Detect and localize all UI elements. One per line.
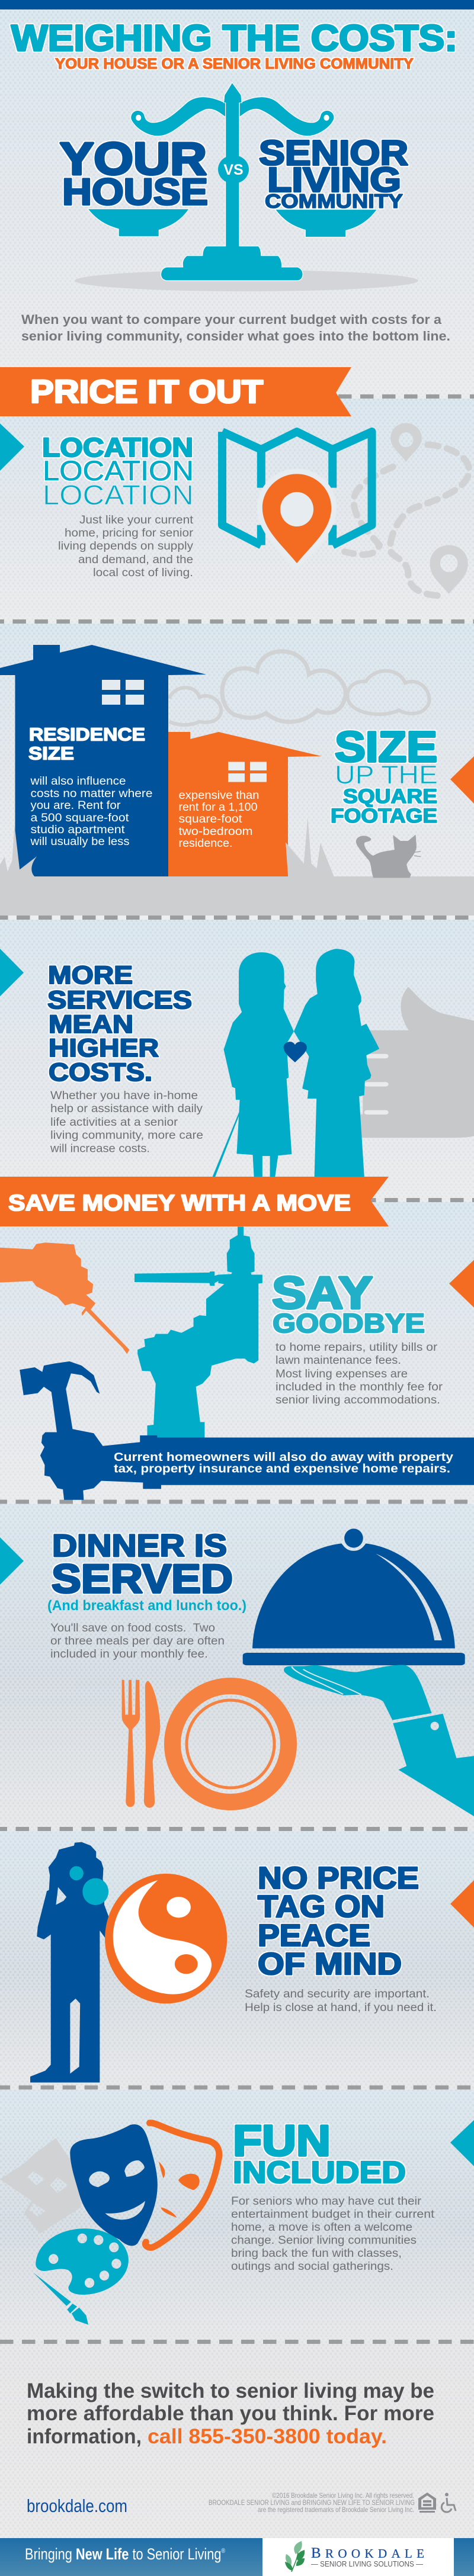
heading: say goodbye: SAY — [272, 1267, 373, 1318]
peace of mind text: Help is close at hand, if you need it. — [245, 2002, 437, 2014]
icon: route and pins — [345, 423, 469, 596]
meals text — [50, 1622, 225, 1660]
tagline: Bringing New Life to Senior Living — [25, 2545, 244, 2563]
icon: plate — [172, 1686, 289, 1802]
call to action: information, — [27, 2425, 142, 2448]
fun text: For seniors who may have cut their — [231, 2195, 422, 2208]
banner: save money with a move: SAVE MONEY WITH A MOVE — [8, 1191, 351, 1216]
panel: no price tag — [30, 1842, 474, 2083]
services text: living community, more care — [50, 1129, 203, 1142]
legal text: are the registered trademarks of Brookdale Senior Living Inc. — [258, 2506, 414, 2514]
heading: more services mean higher costs: SERVICES — [47, 986, 192, 1014]
meals text: included in your monthly fee. — [50, 1648, 208, 1660]
services text: Whether you have in-home — [50, 1090, 198, 1102]
panel: say goodbye — [0, 1226, 474, 1500]
heading: fun included: FUN — [233, 2117, 331, 2165]
fun text: outings and social gatherings. — [231, 2260, 393, 2273]
blue house: you are. Rent for — [31, 799, 121, 812]
location text: home, pricing for senior — [65, 527, 194, 539]
heading: no price tag on peace of mind: OF MIND — [258, 1947, 402, 1981]
heading: no price tag on peace of mind: NO PRICE — [258, 1861, 419, 1896]
subheading: (And breakfast and lunch too.) — [47, 1598, 246, 1614]
logo name: B ROOKDALE — [311, 2545, 424, 2561]
location text: and demand, and the — [78, 554, 193, 566]
blue house: RESIDENCE — [29, 724, 145, 745]
icon: tragedy mask outline — [145, 2123, 219, 2247]
heading: size up the square footage: SIZE — [335, 724, 437, 771]
heading: location: LOCATION — [43, 455, 194, 486]
icon: puzzle — [0, 2138, 82, 2234]
icon: waiter hand — [284, 1665, 474, 1816]
blue bar with hammer hand: Current homeowners will also do away with property — [114, 1450, 454, 1464]
scale shadow — [75, 270, 418, 291]
heading: your house — [60, 134, 208, 213]
fun text — [231, 2195, 435, 2273]
chevron — [450, 2120, 474, 2166]
goodbye text: Most living expenses are — [276, 1368, 408, 1380]
heading: no price tag on peace of mind: TAG ON — [258, 1890, 385, 1924]
heading: more services mean higher costs: HIGHER — [49, 1034, 159, 1062]
icon: serving cloche — [243, 1528, 465, 1665]
vs badge — [218, 155, 249, 184]
chevron — [450, 1880, 474, 1928]
heading: dinner is served: DINNER IS — [52, 1528, 227, 1563]
tagline: ® — [221, 2548, 225, 2555]
heading: your house: YOUR — [60, 134, 207, 185]
orange house: rent for a 1,100 — [179, 801, 257, 814]
banner: price it out: PRICE IT OUT — [30, 373, 263, 410]
grass — [0, 817, 334, 876]
icon: person with headset — [30, 1842, 110, 2083]
intro text: When you want to compare your current budget with costs for a — [21, 312, 442, 327]
website: brookdale.com — [27, 2495, 127, 2516]
location text — [58, 514, 194, 579]
chevron — [0, 1537, 24, 1585]
chevron — [0, 949, 24, 996]
panel: dinner is served — [0, 1528, 474, 1816]
heading: no price tag on peace of mind: PEACE — [258, 1919, 370, 1953]
blue bar with hammer hand — [20, 1361, 474, 1500]
heading: more services mean higher costs: COSTS. — [49, 1058, 152, 1087]
heading: say goodbye: GOODBYE — [273, 1308, 425, 1338]
icon: yin yang — [105, 1874, 227, 2003]
heading: size up the square footage — [331, 724, 438, 827]
meals text: You'll save on food costs. Two — [50, 1622, 215, 1634]
orange house: two-bedroom — [179, 826, 252, 838]
heading: senior living community: COMMUNITY — [265, 190, 403, 212]
panel: closing — [27, 2379, 456, 2516]
legal text: ©2016 Brookdale Senior Living Inc. All rights reserved. — [272, 2491, 414, 2500]
clouds — [169, 651, 430, 725]
vs badge: VS — [223, 162, 244, 178]
blue house: costs no matter where — [31, 788, 153, 800]
services text — [50, 1090, 203, 1155]
panel: more services — [0, 949, 474, 1177]
panel: header — [11, 18, 457, 343]
icon: balance scale — [88, 82, 377, 281]
chevron — [450, 756, 474, 804]
call to action — [27, 2379, 434, 2448]
heading: size up the square footage: UP THE — [335, 760, 438, 789]
blue house: will usually be less — [30, 836, 130, 848]
services text: life activities at a senior — [50, 1116, 178, 1129]
intro text: senior living community, consider what goes into the bottom line. — [21, 329, 450, 343]
icon: map with pin — [222, 432, 372, 563]
heading: location — [42, 432, 194, 510]
blue bar with hammer hand: tax, property insurance and expensive home repairs. — [114, 1462, 450, 1476]
heading: your house: HOUSE — [62, 172, 208, 213]
icon: accessibility — [441, 2493, 456, 2512]
icon: equal housing — [418, 2493, 436, 2513]
panel: fun included — [0, 2117, 474, 2325]
peace of mind text: Safety and security are important. — [245, 1988, 430, 2000]
banner: save money with a move — [0, 1177, 389, 1226]
heading: more services mean higher costs: MORE — [48, 961, 133, 990]
orange house: residence. — [179, 837, 232, 850]
icon: fork and knife — [122, 1680, 160, 1808]
icon: leaf sprig — [285, 2541, 305, 2572]
fun text: bring back the fun with classes, — [231, 2247, 402, 2260]
fun text: home, a move is often a welcome — [231, 2221, 412, 2234]
orange house — [168, 732, 322, 876]
heading: location: LOCATION — [43, 479, 194, 510]
logo panel — [262, 2538, 454, 2576]
icon: palette and brush — [33, 2228, 129, 2325]
goodbye text: included in the monthly fee for — [276, 1381, 443, 1393]
top bar — [0, 0, 474, 9]
chevron — [449, 1260, 474, 1308]
heading: size up the square footage: SQUARE — [343, 785, 437, 808]
services text: help or assistance with daily — [50, 1103, 203, 1115]
goodbye text: lawn maintenance fees. — [276, 1354, 401, 1367]
services text: will increase costs. — [50, 1143, 150, 1155]
goodbye text — [276, 1341, 443, 1406]
heading: fun included: INCLUDED — [233, 2156, 406, 2190]
blue house: SIZE — [28, 743, 74, 764]
fun text: entertainment budget in their current — [231, 2208, 435, 2221]
location text: Just like your current — [79, 514, 194, 526]
heading: no price tag on peace of mind — [258, 1861, 419, 1981]
call to action: more affordable than you think. For more — [27, 2402, 434, 2425]
heading: senior living community — [259, 134, 408, 212]
heading: dinner is served: SERVED — [52, 1556, 233, 1601]
icon: thumbs up — [331, 987, 474, 1138]
heading: location: LOCATION — [42, 432, 193, 462]
subtitle: YOUR HOUSE OR A SENIOR LIVING COMMUNITY — [55, 56, 414, 72]
icon: cat — [356, 834, 421, 878]
heading: more services mean higher costs — [47, 961, 192, 1087]
icon: hand with drill — [134, 1226, 262, 1438]
heading: dinner is served — [52, 1528, 233, 1601]
meals text: or three meals per day are often — [50, 1635, 225, 1647]
fun text: change. Senior living communities — [231, 2234, 417, 2247]
logo tagline: — SENIOR LIVING SOLUTIONS — — [311, 2559, 423, 2568]
orange house: square-foot — [179, 813, 242, 826]
orange house: expensive than — [179, 789, 260, 802]
icon: hand with screwdriver — [0, 1242, 129, 1354]
chevron — [0, 423, 24, 471]
heading: say goodbye — [272, 1267, 425, 1338]
goodbye text: senior living accommodations. — [276, 1394, 440, 1406]
location text: living depends on supply — [58, 540, 194, 553]
goodbye text: to home repairs, utility bills or — [276, 1341, 438, 1354]
icon: comedy mask — [70, 2124, 158, 2246]
footer — [0, 2538, 474, 2576]
blue house — [0, 645, 206, 876]
banner: price it out — [0, 367, 351, 416]
blue house: studio apartment — [31, 824, 125, 836]
location text: local cost of living. — [93, 567, 193, 579]
peace of mind text — [245, 1988, 437, 2014]
title: WEIGHING THE COSTS: — [11, 18, 457, 59]
legal text: BROOKDALE SENIOR LIVING and BRINGING NEW LIFE TO SENIOR LIVING — [209, 2498, 415, 2507]
intro text — [21, 312, 450, 343]
heading: size up the square footage: FOOTAGE — [331, 805, 437, 827]
heading: senior living community: LIVING — [267, 161, 401, 199]
heading: more services mean higher costs: MEAN — [49, 1010, 133, 1039]
panel: residence size — [0, 645, 474, 878]
legal text — [209, 2491, 415, 2514]
blue house: will also influence — [30, 775, 126, 788]
heading: senior living community: SENIOR — [259, 134, 408, 173]
heading: fun included — [233, 2117, 406, 2190]
panel: location — [0, 423, 469, 596]
call to action: Making the switch to senior living may be — [27, 2379, 434, 2402]
blue house: a 500 square-foot — [31, 812, 129, 824]
icon: two seniors with heart — [213, 949, 379, 1177]
call to action: call 855-350-3800 today. — [148, 2425, 387, 2448]
